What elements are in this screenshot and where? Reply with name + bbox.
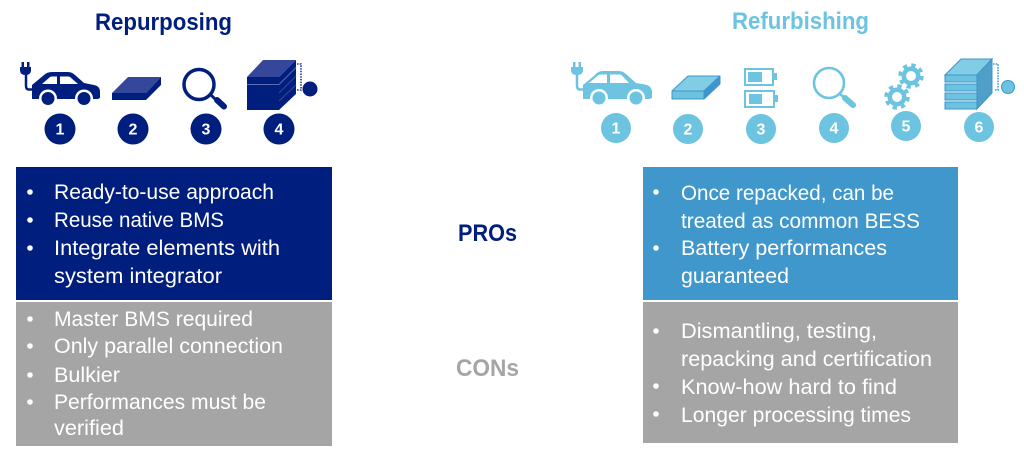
icon: magnifier: [184, 70, 224, 106]
step numbers: 5: [902, 118, 911, 136]
step numbers: 4: [830, 120, 839, 138]
panel: repurposing cons: [16, 302, 332, 446]
icon: battery stack: [247, 60, 318, 110]
heading: Repurposing: Repurposing: [95, 9, 232, 36]
panel: repurposing cons: verified: [54, 417, 124, 440]
step numbers: [44, 114, 294, 144]
panel: refurbishing cons: [643, 302, 958, 443]
repurposing icons: [20, 60, 318, 144]
icon: electric car: [571, 62, 652, 107]
panel: refurbishing cons: Dismantling, testing,: [681, 320, 877, 343]
panel: refurbishing cons: repacking and certification: [681, 348, 932, 371]
step numbers: 4: [275, 122, 284, 138]
icon: electric car: [20, 62, 100, 108]
step numbers: 3: [202, 122, 211, 138]
panel: refurbishing pros: Battery performances: [681, 237, 887, 260]
icon: battery module: [672, 76, 720, 99]
label: CONs: CONs: [456, 355, 519, 382]
panel: repurposing pros: system integrator: [54, 265, 222, 288]
icon: magnifier: [814, 68, 853, 105]
panel: refurbishing pros: [643, 167, 958, 300]
label: PROs: PROs: [458, 220, 517, 247]
step numbers: 1: [56, 122, 65, 138]
panel: repurposing pros: [16, 167, 332, 300]
panel: refurbishing pros: guaranteed: [681, 265, 789, 288]
panel: repurposing cons: Master BMS required: [54, 308, 253, 331]
panel: repurposing pros: Ready-to-use approach: [54, 181, 274, 204]
icon: battery module: [112, 77, 161, 100]
heading: Refurbishing: Refurbishing: [732, 8, 869, 35]
step numbers: 2: [684, 122, 693, 138]
step numbers: [601, 111, 994, 144]
step numbers: 6: [975, 120, 984, 136]
panel: repurposing cons: Only parallel connection: [54, 335, 283, 358]
icon: gears: [886, 65, 922, 108]
step numbers: 1: [612, 120, 621, 138]
icon: battery cells: [745, 69, 778, 107]
panel: repurposing cons: Performances must be: [54, 391, 266, 414]
panel: refurbishing cons: Longer processing times: [681, 404, 911, 427]
panel: refurbishing pros: treated as common BESS: [681, 210, 920, 233]
step numbers: 2: [129, 122, 138, 138]
refurbishing icons: [571, 59, 1014, 144]
panel: repurposing pros: Reuse native BMS: [54, 209, 224, 232]
step numbers: 3: [757, 122, 766, 138]
panel: repurposing pros: Integrate elements with: [54, 237, 280, 260]
panel: repurposing cons: Bulkier: [54, 364, 120, 387]
panel: refurbishing pros: Once repacked, can be: [681, 182, 894, 205]
panel: refurbishing cons: Know-how hard to find: [681, 376, 897, 399]
icon: battery stack: [945, 59, 1014, 109]
